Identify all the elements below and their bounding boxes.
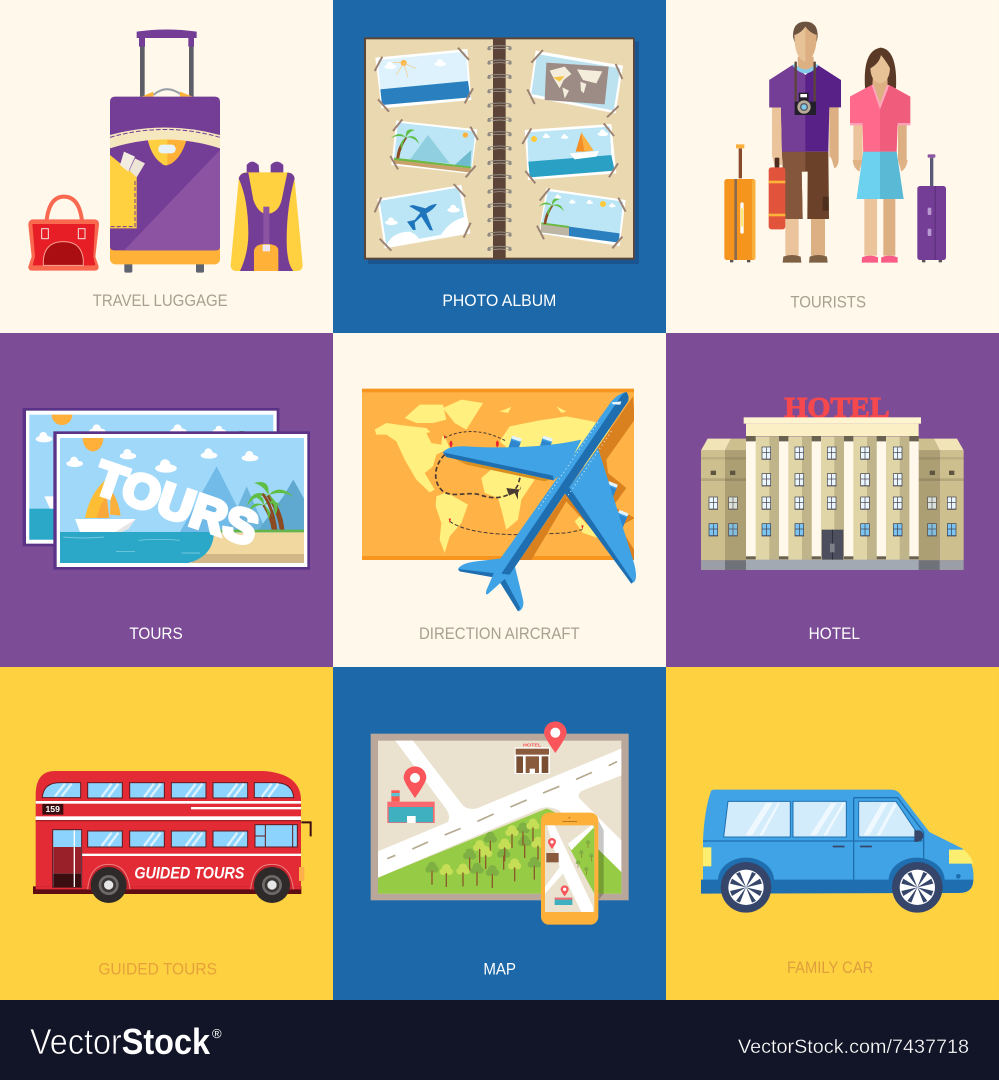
panel: guided tours: [0, 667, 333, 1000]
figure: man with camera: [769, 22, 841, 263]
route number plate: 159: [45, 804, 60, 814]
panel: family car: [666, 667, 999, 1000]
icon: red hand bag: [769, 158, 785, 229]
aircraft: [443, 392, 636, 611]
registered mark: ®: [212, 1026, 222, 1041]
neon sign: HOTEL: [784, 392, 890, 424]
icon: orange suitcase: [724, 144, 755, 262]
world map: [362, 389, 634, 560]
heading: FAMILY CAR: [787, 958, 873, 977]
heading: TRAVEL LUGGAGE: [93, 291, 228, 310]
photo: sea with sun: [375, 48, 473, 112]
double decker bus: [33, 771, 311, 903]
street map: [371, 734, 629, 900]
footer image id: VectorStock.com/7437718: [738, 1037, 969, 1058]
icon: airport building with pin: [387, 766, 435, 823]
panel: map: [333, 667, 666, 1000]
footer logo: VectorStock: [30, 1021, 211, 1062]
heading: DIRECTION AIRCRAFT: [419, 624, 580, 643]
panel: tours: [0, 333, 333, 667]
front postcard: [53, 431, 310, 570]
panel: direction aircraft: [333, 333, 666, 667]
icon: purple suitcase: [110, 29, 220, 273]
icon: backpack: [231, 162, 303, 271]
heading: HOTEL: [809, 624, 860, 643]
footer bar: [0, 1000, 999, 1080]
icon: hotel building with pin: [515, 721, 567, 774]
aircraft shadow: [453, 396, 635, 560]
back postcard: [23, 408, 279, 546]
heading: MAP: [483, 959, 516, 978]
photo: beach with palm: [537, 188, 626, 248]
blue van: [701, 790, 974, 913]
heading: TOURISTS: [790, 293, 866, 312]
banner word: TOURS: TOURS: [88, 452, 265, 557]
panel: photo album: [333, 0, 666, 333]
icon: purple suitcase: [917, 154, 946, 262]
figure: woman: [850, 48, 910, 263]
panel: hotel: [666, 333, 999, 667]
route number plate: [42, 804, 63, 815]
panel: travel luggage: [0, 0, 333, 333]
icon: hotel building with pin: HOTEL: [523, 742, 541, 748]
album book: [364, 37, 639, 264]
panel: tourists: [666, 0, 999, 333]
hotel building: [701, 392, 964, 570]
heading: PHOTO ALBUM: [442, 291, 556, 310]
photo: airplane in sky: [375, 184, 471, 251]
photo: world map: [527, 50, 623, 117]
bus lettering: GUIDED TOURS: [134, 864, 244, 883]
heading: TOURS: [129, 624, 183, 643]
icon: smartphone with map: [541, 813, 604, 925]
icon: red handbag: [28, 197, 99, 271]
photo: sailboat: [522, 123, 618, 183]
heading: GUIDED TOURS: [98, 959, 217, 978]
photo: palm and mountains: [390, 119, 478, 177]
